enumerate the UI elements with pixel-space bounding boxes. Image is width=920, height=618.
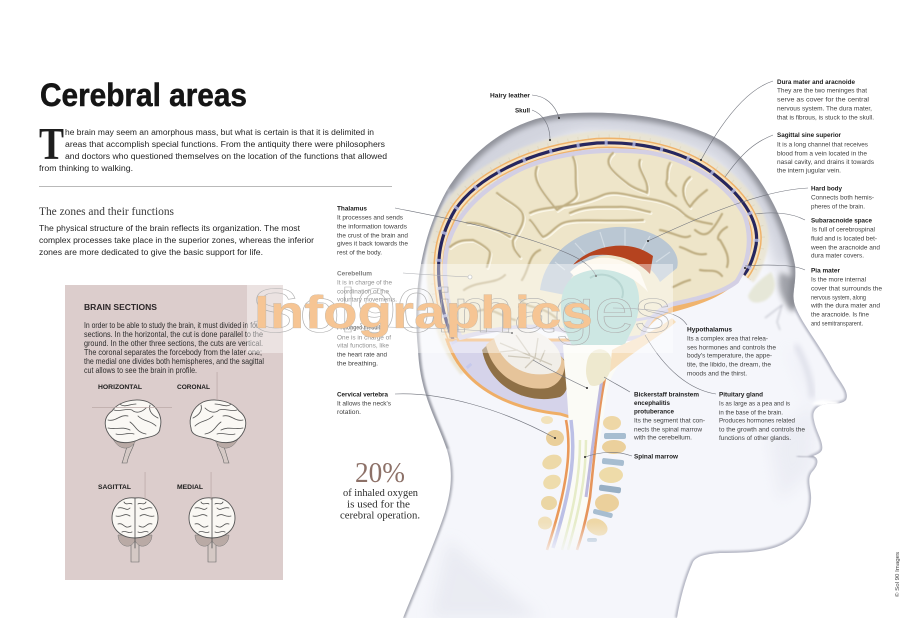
section: medial (177, 472, 235, 562)
label: pia mater: Pia mater (811, 268, 841, 274)
panel text: The coronal separates the forcebody from the later one; (84, 348, 262, 357)
intro paragraph: areas that accomplish special functions. From the antiquity there were philosophers (65, 139, 385, 149)
zones paragraph: complex processes take place in the superior zones, whereas the inferior (39, 235, 314, 245)
section: sagittal (98, 472, 158, 562)
label: subaracnoide space: dura mater covers. (811, 252, 864, 260)
label: hypothalamus: Hypothalamus (687, 326, 732, 334)
label: hypothalamus: tite, the libido, the dream, the (687, 362, 771, 368)
label: hypothalamus: Its a complex area that relea- (687, 336, 768, 342)
label: dura mater and aracnoide: serve as cover for the central (777, 96, 869, 104)
intro paragraph: he brain may seem an amorphous mass, but what is certain is that it is delimited in (65, 127, 374, 137)
label: pia mater: with the dura mater and (810, 302, 880, 310)
label: cerebellum: Cerebellum (337, 270, 372, 278)
label: sagittal sine superior (777, 132, 874, 174)
label: bickerstaff brainstem encephalitis protuberance (633, 392, 705, 442)
illustration: cerebellum (482, 329, 568, 399)
intro paragraph: from thinking to walking. (39, 163, 133, 173)
section: coronal: CORONAL (177, 384, 210, 391)
callout: 20 percent of oxygen: is used for the (347, 500, 410, 510)
label: prolonged medulla: the breathing. (337, 360, 378, 368)
panel text: the medial one divides both hemispheres, and the sagittal (84, 357, 264, 366)
leader lines (385, 81, 808, 458)
panel text: sections. In the horizontal, the cut is done parallel to the (84, 330, 263, 339)
label: dura mater and aracnoide: nervous system. The dura mater, (777, 106, 872, 112)
label: cerebellum: It is in charge of the (337, 280, 392, 286)
label: prolonged medulla: vital functions, like (337, 342, 389, 350)
label: skull: Skull (515, 108, 530, 114)
illustration: cerebrum with folds (447, 153, 747, 340)
label: subaracnoide space: Is full of cerebrospinal (812, 226, 875, 234)
panel text (84, 321, 264, 375)
label: bickerstaff brainstem encephalitis protuberance: nects the spinal marrow (634, 426, 702, 434)
panel text: cut allows to see the brain in profile. (84, 366, 197, 375)
illustration: cervical vertebrae (538, 416, 626, 542)
label: thalamus: It processes and sends (337, 214, 403, 222)
watermark: Infographics (254, 286, 593, 338)
label: cerebellum (337, 270, 397, 304)
callout: 20 percent of oxygen (340, 457, 420, 522)
section: medial: MEDIAL (177, 484, 203, 491)
label: bickerstaff brainstem encephalitis protuberance: with the cerebellum. (633, 434, 692, 442)
label: pituitary gland: functions of other glands. (719, 435, 791, 442)
label: prolonged medulla: Prolonged medulla (337, 324, 383, 332)
label: hypothalamus (687, 326, 776, 378)
callout: 20 percent of oxygen: of inhaled oxygen (343, 488, 419, 499)
intro paragraph (39, 127, 387, 173)
callout: 20 percent of oxygen: cerebral operation. (340, 510, 420, 522)
label: pia mater: and semitransparent. (811, 320, 863, 328)
label: hairy leather: Hairy leather (490, 92, 531, 100)
illustration: brainstem and spinal marrow (547, 310, 676, 550)
illustration: corpus callosum, fornix and thalamus (540, 227, 678, 350)
label: dura mater and aracnoide: They are the two meninges that (777, 88, 867, 94)
label: subaracnoide space: fluid and is located bet- (811, 236, 877, 242)
panel text: ground. In the other three sections, the cuts are vertical. (84, 339, 263, 348)
drop cap: T (39, 119, 64, 169)
label: hard body: pheres of the brain. (811, 204, 865, 210)
label: cervical vertebra: It allows the neck's (337, 400, 391, 408)
label: bickerstaff brainstem encephalitis protuberance: Bickerstaff brainstem (634, 392, 699, 398)
label: pia mater (810, 268, 882, 328)
label: cervical vertebra (337, 392, 391, 416)
intro paragraph: and doctors who questioned themselves on the location of the functions that allowed (65, 151, 387, 161)
label: dura mater and aracnoide (777, 79, 874, 122)
label: pituitary gland: Produces hormones related (719, 418, 795, 424)
section: sagittal: SAGITTAL (98, 484, 131, 491)
label: pituitary gland: Is as large as a pea and is (719, 400, 790, 408)
label: pia mater: nervous system, along (811, 294, 866, 302)
zones paragraph: The physical structure of the brain reflects its organization. The most (39, 223, 301, 233)
section: coronal (177, 372, 246, 463)
label: thalamus: the information towards (337, 224, 407, 230)
label: cerebellum: coordination of the (337, 288, 389, 296)
label: sagittal sine superior: blood from a vein located in the (777, 150, 867, 158)
label: thalamus: Thalamus (337, 206, 367, 212)
label: pituitary gland: to the growth and controls the (719, 426, 805, 434)
label: bickerstaff brainstem encephalitis protuberance: protuberance (634, 408, 674, 416)
panel heading: BRAIN SECTIONS (84, 302, 157, 312)
zones paragraph: zones are more dedicated to give the basic support for life. (39, 247, 263, 257)
label: prolonged medulla (337, 324, 391, 368)
panel text: In order to be able to study the brain, it must divided in four (84, 321, 262, 330)
label: spinal marrow: Spinal marrow (634, 454, 678, 460)
callout: 20 percent of oxygen: 20% (355, 457, 405, 489)
illustration: skull and meninges layers (439, 143, 757, 420)
zones paragraph (39, 223, 314, 257)
label: prolonged medulla: the heart rate and (337, 352, 387, 358)
label: hard body: Connects both hemis- (811, 194, 874, 202)
panel: brain sections (65, 285, 283, 580)
label: prolonged medulla: One is in charge of (337, 334, 391, 342)
label: subaracnoide space: ween the aracnoide and (810, 244, 880, 252)
watermark: Sol90images (251, 277, 671, 346)
label: pia mater: the aracnoide. Is fine (811, 312, 869, 318)
label: pituitary gland: in the base of the brain. (719, 410, 783, 416)
label: sagittal sine superior: It is a long channel that receives (777, 142, 868, 148)
label: sagittal sine superior: Sagittal sine superior (777, 132, 841, 139)
label: bickerstaff brainstem encephalitis protuberance: encephalitis (634, 400, 670, 407)
credit: © Sol 90 Images (894, 551, 901, 597)
head silhouette (403, 113, 847, 618)
label: pia mater: Is the more internal (811, 276, 866, 284)
label: cervical vertebra: Cervical vertebra (337, 392, 388, 398)
label: thalamus: the crust of the brain and (337, 232, 408, 240)
section: horizontal: HORIZONTAL (98, 384, 142, 391)
label: sagittal sine superior: nasal cavity, and drains it towards (777, 159, 874, 166)
label: subaracnoide space (810, 218, 880, 260)
label: hypothalamus: body's temperature, the appe- (687, 352, 772, 360)
label: thalamus: rest of the body. (337, 250, 382, 256)
title: Cerebral areas (40, 77, 247, 113)
label: dura mater and aracnoide: Dura mater and aracnoide (777, 79, 855, 86)
label: pituitary gland (719, 392, 805, 442)
label: cerebellum: voluntary movements. (337, 296, 397, 304)
subheading: The zones and their functions (39, 206, 175, 218)
label: hypothalamus: ses hormones and controls the (687, 344, 776, 352)
watermark (247, 264, 673, 353)
label: sagittal sine superior: the intern jugular vein. (777, 168, 841, 174)
label: bickerstaff brainstem encephalitis protuberance: Its the segment that con- (634, 418, 705, 424)
label: thalamus: gives it back towards the (337, 240, 408, 248)
label: hard body: Hard body (811, 186, 842, 192)
label: pituitary gland: Pituitary gland (719, 392, 763, 398)
label: pia mater: cover that surrounds the (811, 286, 882, 292)
label: subaracnoide space: Subaracnoide space (811, 218, 872, 224)
label: hard body (811, 186, 874, 210)
label: cervical vertebra: rotation. (337, 409, 361, 416)
label: dura mater and aracnoide: that is fibrous, is stuck to the skull. (777, 114, 874, 122)
neck fade over spine (530, 522, 640, 562)
section: horizontal (92, 384, 172, 463)
label: thalamus (337, 206, 408, 256)
label: hypothalamus: moods and the thirst. (687, 370, 747, 378)
